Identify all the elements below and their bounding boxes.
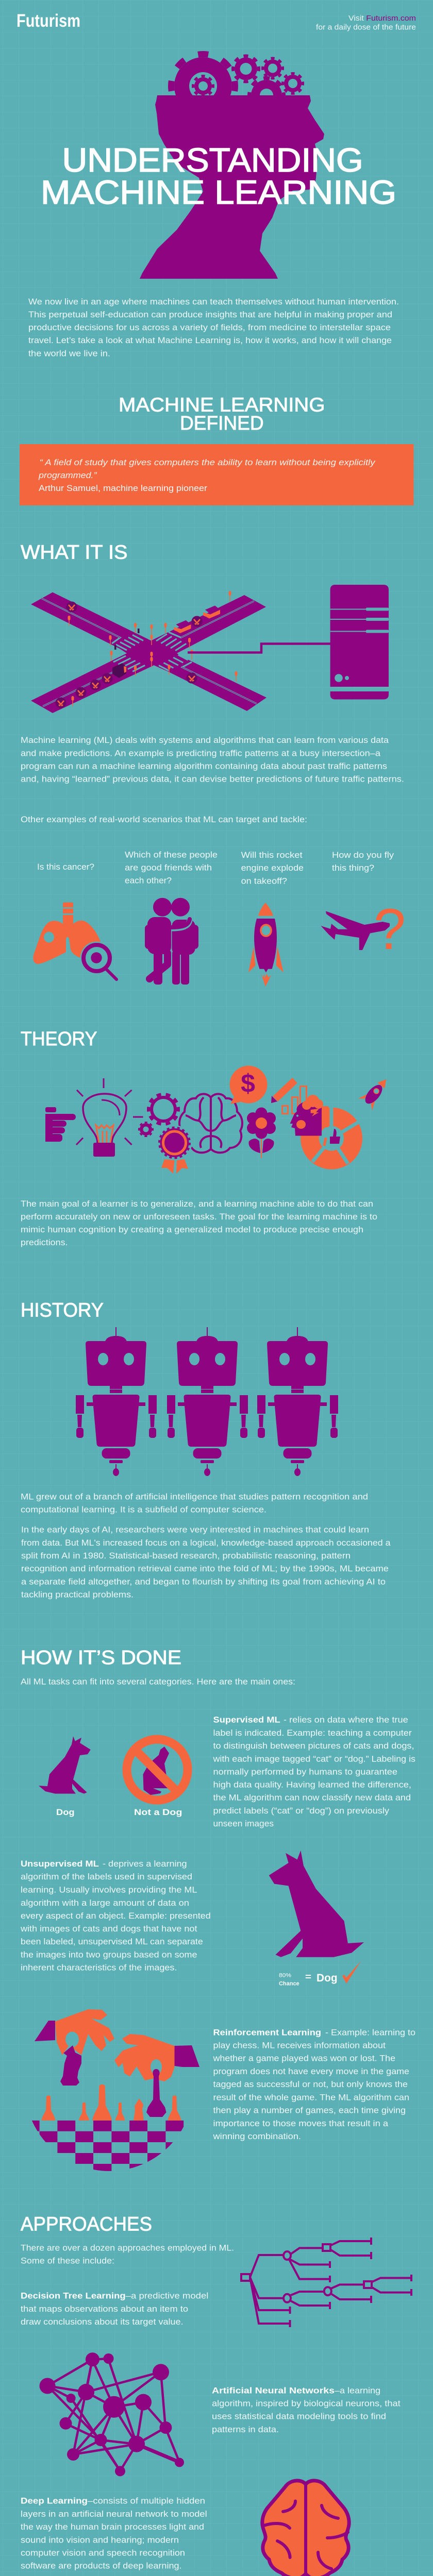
intro text: This perpetual self-education can produce insights that are helpful in making proper and (28, 310, 392, 319)
visit line: for a daily dose of the future (316, 23, 416, 32)
right hand holding queen (114, 2034, 199, 2117)
heading: history: HISTORY (21, 1299, 104, 1321)
text: theory: predictions. (21, 1238, 68, 1247)
illustration: chess hands and board (22, 2009, 202, 2175)
illustration: head with gears (140, 54, 324, 279)
text: reinforcement learning: Reinforcement Learning (213, 2027, 321, 2037)
text: approaches intro: There are over a dozen approaches employed in ML. (21, 2243, 234, 2252)
icon: small rocket (358, 1073, 393, 1110)
text: deep learning (21, 2496, 207, 2571)
text: history part two: split from AI in 1980. Statistical-based research, probabilistic reasoning, pattern (21, 1551, 351, 1561)
icon: plane with question mark: ? (374, 897, 406, 961)
connector wire (188, 644, 330, 652)
text: deep learning: computer vision and speech recognition (21, 2548, 185, 2557)
text: supervised ML: - relies on data where the true (284, 1715, 408, 1725)
text: what it is: and, having “learned” previous data, it can devise better predictions of future traffic patterns. (21, 774, 404, 784)
icon: dog (39, 1736, 91, 1794)
text: supervised ML: Supervised ML (213, 1715, 280, 1725)
icon: brain (262, 2481, 349, 2576)
question: plane: How do you fly (332, 850, 394, 860)
diagram: neural network (39, 2352, 184, 2476)
text: what it is: Machine learning (ML) deals with systems and algorithms that can learn from various data (21, 735, 389, 745)
icon: speech bubble with dollar (230, 1065, 267, 1104)
text: unsupervised ML: - deprives a learning (103, 1859, 187, 1869)
text: unsupervised ML: inherent characteristics of the images. (21, 1963, 177, 1973)
text: decision tree learning (21, 2291, 208, 2327)
text: deep learning: the way the human brain processes light and (21, 2522, 204, 2532)
icon: brain outline (179, 1094, 242, 1153)
text: theory: The main goal of a learner is to generalize, and a learning machine able to do that can (21, 1199, 373, 1209)
text: supervised ML: the ML algorithm can now classify new data and (213, 1793, 411, 1803)
text: artificial neural networks: algorithm, inspired by biological neurons, that (212, 2399, 401, 2409)
text: theory: perform accurately on new or unforeseen tasks. The goal for the learning machine is to (21, 1212, 377, 1222)
text: reinforcement learning: - Example: learning to (325, 2027, 415, 2037)
callout: Arthur Samuel quote: Arthur Samuel, machine learning pioneer (39, 483, 207, 493)
text: approaches intro: Some of these include: (21, 2256, 114, 2266)
title: MACHINE LEARNING (41, 173, 396, 211)
text: history part two: tackling practical problems. (21, 1590, 134, 1600)
text: deep learning: Deep Learning (21, 2496, 88, 2506)
text: reinforcement learning: whether a game played was won or lost. The (212, 2054, 395, 2063)
intro text: We now live in an age where machines can teach themselves without human intervention. (28, 297, 399, 307)
icon: not a dog (127, 1739, 188, 1800)
question: rocket: on takeoff? (241, 876, 287, 886)
text: deep learning: sound into vision and hearing; modern (21, 2535, 179, 2545)
icon: lightbulb (76, 1078, 143, 1157)
heading: machine learning defined: MACHINE LEARNING (119, 395, 325, 416)
icon: pie ring with thumb (301, 1107, 362, 1170)
text: unsupervised ML: algorithm with a large amount of data on (21, 1898, 189, 1908)
heading: machine learning defined: DEFINED (180, 413, 264, 434)
text: what it is: program can run a machine learning algorithm containing data about past traffic patterns (21, 761, 387, 771)
text: other examples: Other examples of real-world scenarios that ML can target and tackle: (21, 815, 307, 824)
icon: head with idea cloud (290, 1095, 328, 1136)
question: friends: each other? (125, 876, 172, 886)
text: reinforcement learning: play chess. ML receives information about (213, 2041, 386, 2050)
text: unsupervised ML: the images into two groups based on some (21, 1950, 197, 1960)
intro text: productive decisions for us across a variety of fields, from medicine to interstellar space (28, 323, 391, 332)
question: friends (125, 850, 218, 886)
cars and trucks (56, 602, 220, 708)
illustration: traffic intersection (31, 591, 267, 713)
label: 80% chance dog: Dog (317, 1972, 338, 1984)
text: unsupervised ML: with images of cats and dogs that have not (20, 1924, 197, 1934)
text: decision tree learning: that maps observations about an item to (21, 2304, 188, 2314)
text: reinforcement learning: program does not have every move in the game (213, 2066, 409, 2076)
icon: check mark (342, 1961, 361, 1984)
label: 80% chance dog: = (305, 1972, 311, 1982)
left hand holding knight (35, 2009, 114, 2086)
icon: gears (139, 1094, 178, 1137)
text: deep learning: layers in an artificial neural network to model (21, 2509, 207, 2519)
text: reinforcement learning: result of the whole game. The ML algorithm can (213, 2093, 409, 2102)
illustration: theory icons (45, 1065, 393, 1174)
text: supervised ML: unseen images (213, 1819, 274, 1828)
text: approaches intro (21, 2243, 234, 2266)
intro text: the world we live in. (28, 348, 110, 359)
text: artificial neural networks (212, 2385, 401, 2434)
callout: Arthur Samuel quote (20, 444, 413, 505)
text: unsupervised ML: been labeled, unsupervised ML can separate (21, 1937, 203, 1946)
text: supervised ML: with each image tagged “cat” or “dog.” Labeling is (212, 1754, 415, 1764)
icon: award medal (157, 1125, 192, 1174)
label: dog: Dog (56, 1807, 75, 1817)
text: artificial neural networks: –a learning (335, 2385, 380, 2395)
text: artificial neural networks: uses statistical data modeling tools to find (212, 2412, 386, 2421)
chess board (32, 2121, 184, 2171)
street lamps and pedestrians (68, 591, 237, 706)
question: plane (332, 850, 394, 873)
text: unsupervised ML: learning. Usually involves providing the ML (21, 1885, 197, 1895)
text: reinforcement learning: tagged as successful or not, but only knows the (213, 2079, 408, 2089)
label: 80% chance dog: 80% (279, 1972, 291, 1978)
icon: plane with question mark (321, 897, 406, 961)
text: supervised ML: predict labels (“cat” or “dog”) on previously (213, 1806, 390, 1816)
illustration: three robots (76, 1327, 338, 1476)
text: what it is (21, 735, 404, 784)
text: theory (21, 1199, 377, 1247)
question: friends: Which of these people (125, 850, 218, 859)
text: reinforcement learning: winning combination. (212, 2131, 301, 2141)
question: rocket: engine explode (241, 863, 304, 873)
text: decision tree learning: –a predictive model (126, 2291, 208, 2300)
text: what it is: and make predictions. An example is predicting traffic patterns at a busy intersection–a (21, 748, 381, 758)
title (41, 141, 396, 211)
text: deep learning: software are products of deep learning. (21, 2561, 181, 2571)
text: supervised ML: high data quality. Having learned the difference, (213, 1780, 411, 1790)
text: supervised ML: label is indicated. Example: teaching a computer (213, 1728, 412, 1738)
text: unsupervised ML: every aspect of an object. Example: presented (21, 1911, 211, 1921)
icon: two friends (145, 898, 198, 985)
icon: server (330, 585, 389, 700)
text: unsupervised ML (20, 1859, 211, 1973)
intro text (28, 297, 399, 359)
logo: Futurism: Futurism (16, 11, 80, 31)
icon: speech bubble with dollar: $ (241, 1069, 255, 1098)
diagram: decision tree (241, 2238, 411, 2327)
callout: Arthur Samuel quote: programmed.” (38, 470, 97, 480)
text: history part one: computational learning. It is a subfield of computer science. (21, 1505, 267, 1515)
text: supervised ML: normally performed by humans to guarantee (213, 1767, 397, 1776)
icon: large dog (269, 1851, 364, 1957)
visit line: Visit Futurism.com (348, 14, 416, 23)
visit line (316, 14, 416, 32)
heading: machine learning defined (119, 395, 325, 434)
text: reinforcement learning: importance to those moves that result in a (213, 2119, 389, 2128)
label: not a dog: Not a Dog (134, 1807, 182, 1817)
callout: Arthur Samuel quote: “ A field of study that gives computers the ability to learn without being explicitly (40, 457, 376, 467)
text: history part one: ML grew out of a branch of artificial intelligence that studies pattern recognition and (21, 1492, 368, 1501)
label: 80% chance dog: Chance (279, 1980, 299, 1987)
heading: how it's done: HOW IT’S DONE (21, 1647, 181, 1669)
text: supervised ML (212, 1715, 415, 1828)
text: unsupervised ML: Unsupervised ML (21, 1859, 99, 1869)
question: plane: this thing? (332, 863, 374, 873)
text: history part two (21, 1525, 391, 1600)
text: history part two: a separate field altogether, and began to flourish by shifting its goal from achieving AI to (21, 1577, 386, 1587)
text: categories intro: All ML tasks can fit into several categories. Here are the main ones: (21, 1677, 295, 1687)
heading: approaches: APPROACHES (21, 2214, 152, 2235)
text: history part two: from data. But ML's increased focus on a logical, knowledge-based approach occasioned a (21, 1538, 391, 1548)
icon: rocket (248, 903, 284, 987)
text: unsupervised ML: algorithm of the labels used in supervised (21, 1872, 192, 1882)
text: supervised ML: to distinguish between pictures of cats and dogs, (213, 1741, 414, 1751)
icon: pencil and bar chart (271, 1080, 306, 1114)
question: rocket (241, 850, 304, 886)
question: cancer: Is this cancer? (37, 862, 94, 872)
question: rocket: Will this rocket (241, 850, 303, 860)
title: UNDERSTANDING (62, 141, 363, 179)
text: decision tree learning: draw conclusions about its target value. (21, 2317, 184, 2327)
intro text: travel. Let’s take a look at what Machine Learning is, how it works, and how it will change (28, 335, 392, 345)
text: history part two: recognition and information retrieval came into the fold of ML; by the 1990s, ML became (21, 1564, 389, 1573)
text: reinforcement learning (212, 2027, 415, 2141)
text: theory: mimic human cognition by creating a generalized model to produce precise enough (21, 1225, 363, 1234)
text: artificial neural networks: patterns in data. (212, 2425, 279, 2434)
text: history part two: In the early days of AI, researchers were very interested in machines that could learn (21, 1525, 369, 1534)
heading: what it is: WHAT IT IS (21, 542, 128, 564)
lane lines and crosswalks (41, 598, 257, 706)
text: artificial neural networks: Artificial Neural Networks (212, 2385, 335, 2395)
roads (31, 592, 267, 713)
label: 80% chance dog (279, 1972, 338, 1987)
icon: hand (45, 1107, 76, 1142)
text: reinforcement learning: then play a number of games, each time giving (213, 2105, 406, 2115)
orange chess pieces (41, 2084, 181, 2121)
question: friends: are good friends with (125, 863, 212, 873)
heading: theory: THEORY (21, 1028, 97, 1050)
icon: lungs with magnifier (33, 903, 116, 979)
text: deep learning: –consists of multiple hidden (88, 2496, 205, 2506)
text: decision tree learning: Decision Tree Learning (21, 2291, 126, 2300)
text: history part one (21, 1492, 368, 1515)
icon: flower (247, 1108, 276, 1158)
